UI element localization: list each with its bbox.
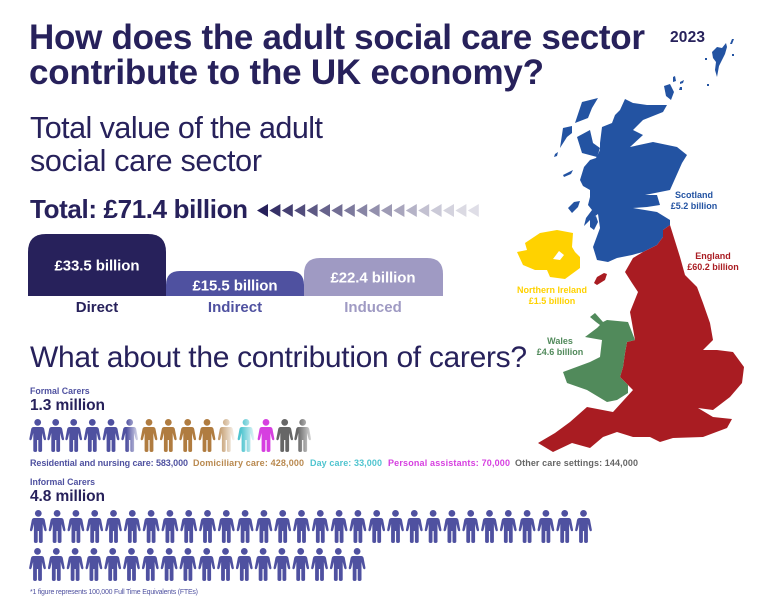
region: Northern Ireland (517, 230, 580, 279)
map label: Scotland: Scotland (675, 190, 713, 200)
bar: indirect (166, 271, 304, 316)
informal carers heading (30, 477, 105, 505)
title: How does the adult social care sector (29, 18, 645, 57)
map label: England: £60.2 billion (687, 262, 739, 272)
map (517, 39, 744, 452)
map label: Scotland: £5.2 billion (671, 201, 717, 211)
informal carers heading: 4.8 million (30, 488, 105, 505)
legend: formal care settings (30, 458, 638, 468)
map label: Northern Ireland: Northern Ireland (517, 285, 587, 295)
map label: Scotland (671, 190, 717, 211)
legend: formal care settings: Personal assistants: 70,000 (388, 458, 510, 468)
formal carers heading: 1.3 million (30, 397, 105, 414)
map label: England (687, 251, 739, 272)
heading: total value: Total value of the adult (30, 111, 324, 145)
arrows (257, 204, 479, 217)
title (29, 18, 645, 92)
map label: Wales: £4.6 billion (537, 347, 583, 357)
formal carers heading: Formal Carers (30, 386, 90, 396)
footnote: *1 figure represents 100,000 Full Time Equivalents (FTEs) (30, 589, 198, 596)
map label: Northern Ireland (517, 285, 587, 306)
map label: Wales: Wales (547, 336, 573, 346)
bar: direct: Direct (76, 299, 118, 316)
bar: induced: Induced (344, 299, 402, 316)
legend: formal care settings: Other care settings: 144,000 (515, 458, 638, 468)
bar: direct (28, 234, 166, 316)
map label: England: England (695, 251, 731, 261)
pictogram: formal carers (29, 419, 311, 452)
heading: carers: What about the contribution of carers? (30, 341, 527, 374)
informal carers heading: Informal Carers (30, 477, 95, 487)
heading: total value: social care sector (30, 144, 262, 178)
legend: formal care settings: Residential and nursing care: 583,000 (30, 458, 188, 468)
region: Scotland (554, 39, 734, 262)
map label: Wales (537, 336, 583, 357)
pictogram: informal carers (29, 510, 592, 581)
total figure: Total: £71.4 billion (30, 194, 248, 224)
year: 2023 (670, 29, 705, 46)
bar: indirect: Indirect (208, 299, 262, 316)
formal carers heading (30, 386, 105, 414)
bar: induced (304, 258, 443, 316)
map label: Northern Ireland: £1.5 billion (529, 296, 575, 306)
legend: formal care settings: Domiciliary care: 428,000 (193, 458, 304, 468)
region: Wales (563, 313, 635, 402)
legend: formal care settings: Day care: 33,000 (310, 458, 382, 468)
region: England (538, 225, 744, 452)
bar: induced: £22.4 billion (330, 270, 416, 286)
title: contribute to the UK economy? (29, 53, 544, 92)
heading: total value (30, 111, 324, 178)
bar: indirect: £15.5 billion (192, 278, 278, 294)
bar: direct: £33.5 billion (54, 258, 140, 274)
